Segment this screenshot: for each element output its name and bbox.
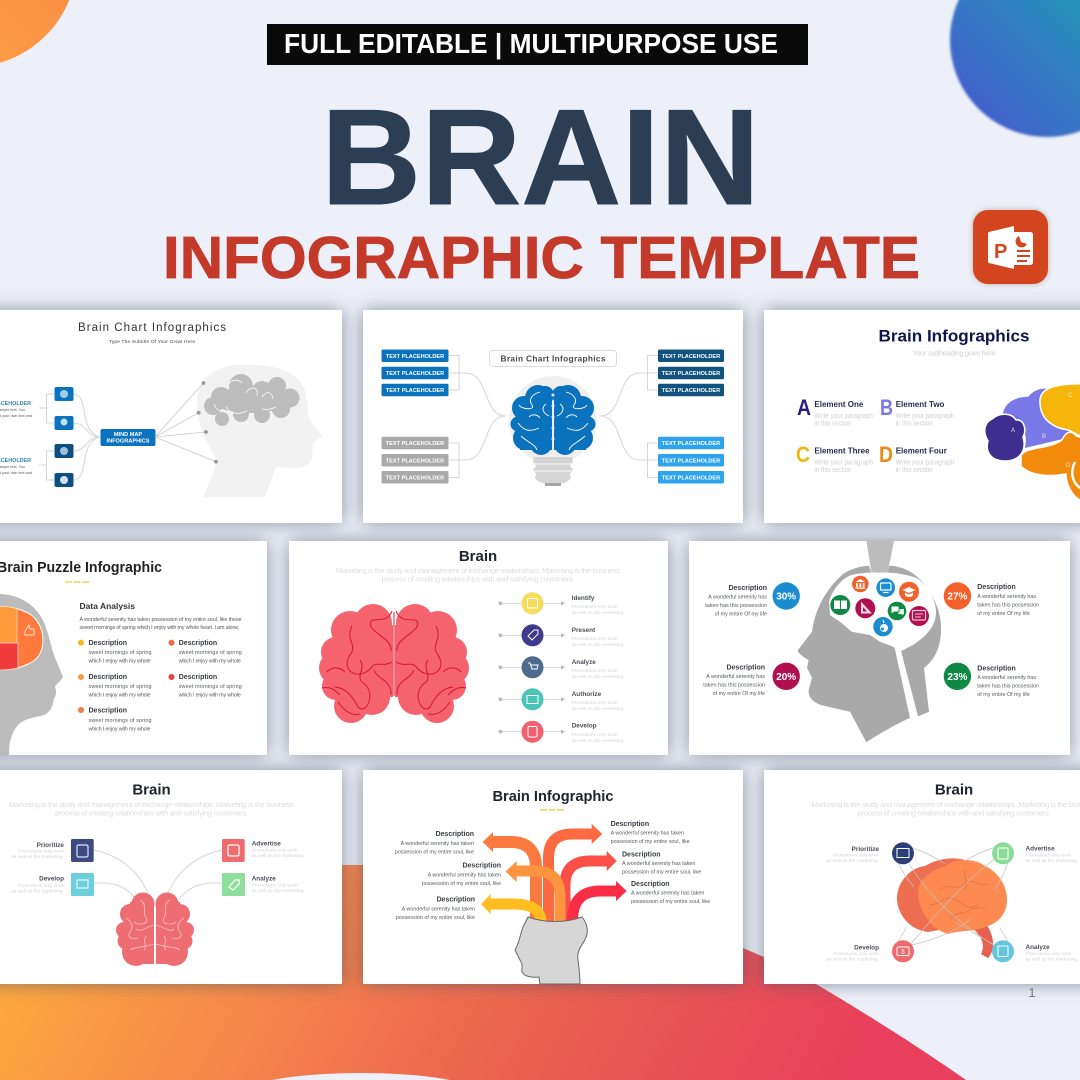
- pink brain: [116, 892, 194, 966]
- item: prioritize: as well as the marketing.: [11, 854, 64, 860]
- list: authorize: as well as the marketing.: [572, 706, 624, 712]
- stat 27%: 27%: [947, 592, 968, 603]
- panel: brain arrows head: [363, 770, 743, 984]
- list: present: Promotions only work: [572, 636, 618, 642]
- stat 30%: Description: [728, 585, 767, 592]
- stat 27%: taken has this possession: [977, 602, 1039, 608]
- element A: Element One: [814, 400, 864, 409]
- stat 20%: [703, 663, 800, 697]
- stat 27%: [944, 582, 1039, 617]
- heading: Brain Chart Infographics: [78, 322, 226, 334]
- center box: INFOGRAPHICS: [107, 438, 150, 444]
- subtitle: INFOGRAPHIC TEMPLATE: [163, 225, 920, 291]
- stat 23%: taken has this possession: [977, 684, 1039, 690]
- connectors: [94, 850, 222, 899]
- heading: Brain: [132, 782, 171, 798]
- list: identify: as well as the marketing.: [572, 610, 624, 616]
- head silhouette: [798, 566, 941, 742]
- data analysis text: sweet mornings of spring which I enjoy with my whole heart. I am alone,: [80, 625, 240, 631]
- item: analyze: Analyze: [1026, 944, 1050, 951]
- item: prioritize: [11, 839, 94, 862]
- item: advertise: Promotions only work: [1026, 852, 1072, 858]
- brain region letters: B: [1042, 434, 1046, 440]
- right descriptions: A wonderful serenity has taken: [631, 890, 704, 896]
- data analysis text: [80, 601, 242, 631]
- descriptions: Description: [88, 674, 127, 681]
- descriptions: sweet mornings of spring: [88, 718, 152, 724]
- blue left buttons: [382, 350, 448, 396]
- banner: FULL EDITABLE | MULTIPURPOSE USE: [284, 28, 778, 59]
- right descriptions: [611, 821, 710, 905]
- item: develop: Develop: [39, 876, 64, 882]
- element C: C: [796, 442, 810, 467]
- left descriptions: Description: [462, 862, 501, 870]
- center box: MIND MAP: [114, 432, 142, 438]
- item: analyze: Promotions only work: [252, 882, 298, 888]
- item: prioritize: as well as the marketing.: [826, 858, 879, 864]
- decorative orange circle: [0, 0, 77, 67]
- item: advertise: [222, 839, 304, 862]
- item: analyze: [992, 940, 1078, 962]
- element D: Element Four: [896, 446, 947, 456]
- brain region letters: C: [1068, 393, 1073, 399]
- left descriptions: A wonderful serenity has taken: [402, 906, 475, 912]
- orange brain illustration: [897, 847, 1008, 958]
- stat 23%: 23%: [947, 672, 968, 683]
- list: present: [498, 624, 624, 648]
- panel: puzzle head: [0, 541, 267, 755]
- center box: [100, 429, 156, 446]
- descriptions: Description: [88, 640, 127, 647]
- placeholder text: [0, 401, 32, 475]
- panel: brain chart light bulb: [363, 310, 743, 523]
- item: develop: $: [901, 950, 905, 956]
- item: develop: Promotions only work: [18, 883, 65, 889]
- right descriptions: possession of my entire soul, like: [622, 870, 701, 876]
- brain region letters: A: [1011, 428, 1015, 434]
- item: develop: Promotions only work: [833, 951, 880, 957]
- item: advertise: as well as the marketing.: [1026, 858, 1078, 864]
- right descriptions: A wonderful serenity has taken: [622, 861, 695, 867]
- title box: [490, 350, 616, 366]
- left descriptions: A wonderful serenity has taken: [428, 872, 501, 878]
- right descriptions: Description: [631, 881, 670, 888]
- item: analyze: Promotions only work: [1026, 951, 1072, 957]
- descriptions: sweet mornings of spring: [179, 684, 242, 690]
- bottom light arc: [246, 1073, 476, 1080]
- element D: D: [879, 442, 893, 467]
- list: authorize: Promotions only work: [572, 700, 618, 706]
- element B: Write your paragraph: [896, 413, 954, 420]
- heading: Brain Infographics: [878, 326, 1030, 346]
- stat 20%: Description: [726, 664, 765, 672]
- descriptions: Description: [179, 674, 217, 681]
- gray left buttons: [382, 437, 448, 484]
- item: advertise: Advertise: [1026, 846, 1055, 852]
- element D: [879, 442, 954, 474]
- element D: Write your paragraph: [896, 460, 954, 466]
- list: analyze: [498, 656, 624, 680]
- descriptions: which I enjoy with my whole: [178, 658, 241, 664]
- panel: red brain: process of creating relationships with and satisfying customers.: [382, 574, 574, 584]
- decorative blue circle: [950, 0, 1080, 137]
- panel: colored brain: [764, 310, 1080, 523]
- item: develop: [826, 940, 914, 962]
- descriptions: which I enjoy with my whole: [88, 692, 150, 698]
- descriptions: sweet mornings of spring: [88, 684, 152, 690]
- element D: in this section: [896, 467, 933, 474]
- arrows: [481, 824, 627, 922]
- element C: Element Three: [814, 446, 870, 456]
- item: develop: as well as the marketing.: [826, 956, 879, 962]
- stat 20%: taken has this possession: [703, 682, 765, 688]
- list: identify: Identify: [572, 595, 595, 602]
- main title: BRAIN: [321, 81, 760, 233]
- heading: Brain Infographic: [492, 788, 614, 805]
- icon: powerpoint: P: [994, 241, 1007, 263]
- panel: orange brain: [764, 770, 1080, 984]
- left descriptions: possession of my entire soul, like: [395, 850, 474, 856]
- icon: powerpoint: [973, 210, 1048, 284]
- connectors: [449, 356, 658, 478]
- bottom gradient wave: [0, 865, 966, 1080]
- stat 30%: 30%: [776, 592, 796, 603]
- list: develop: Develop: [572, 722, 597, 730]
- list: identify: Promotions only work: [572, 604, 618, 610]
- left descriptions: Description: [436, 896, 475, 904]
- subheading: Marketing is the study and management of exchange relationships. Marketing is the business: [336, 566, 620, 575]
- dark right buttons: TEXT PLACEHOLDER: [662, 354, 720, 360]
- item: prioritize: Prioritize: [852, 846, 879, 853]
- panel: brain with four boxes: process of creating relationships with and satisfying customers.: [55, 808, 248, 818]
- element C: Write your paragraph: [814, 460, 873, 466]
- subheading: Your subheading goes here: [912, 348, 996, 358]
- gray left buttons: TEXT PLACEHOLDER: [386, 458, 444, 464]
- data analysis text: A wonderful serenity has taken possession of my entire soul, like these: [80, 617, 242, 623]
- panel: head percentages: [689, 541, 1070, 755]
- panel: orange brain: process of creating relationships with and satisfying customers.: [858, 808, 1050, 818]
- descriptions: which I enjoy with my whole: [88, 658, 150, 664]
- accent dashes: [65, 581, 89, 583]
- gray left buttons: TEXT PLACEHOLDER: [386, 475, 444, 481]
- item: develop: as well as the marketing.: [11, 888, 64, 894]
- item: advertise: Advertise: [252, 840, 281, 848]
- stat 27%: of my entire Of my life: [977, 611, 1030, 617]
- panel: brain with four boxes: [0, 770, 342, 984]
- gray left buttons: TEXT PLACEHOLDER: [386, 441, 444, 447]
- spokes: [155, 381, 218, 464]
- light blue right buttons: TEXT PLACEHOLDER: [662, 441, 720, 447]
- blue left buttons: TEXT PLACEHOLDER: [386, 371, 444, 377]
- descriptions: [78, 640, 242, 732]
- accent dashes: [540, 809, 565, 811]
- head with puzzle brain: [0, 594, 63, 755]
- head: [515, 917, 587, 984]
- descriptions: Description: [88, 708, 127, 714]
- left descriptions: Description: [435, 831, 474, 838]
- brain region letters: [1011, 393, 1073, 469]
- brain region letters: D: [1066, 463, 1071, 469]
- dark right buttons: [658, 350, 724, 396]
- item: prioritize: Prioritize: [37, 842, 64, 849]
- list: develop: [498, 721, 624, 744]
- item: analyze: Analyze: [252, 876, 276, 882]
- stat 30%: A wonderful serenity has: [708, 594, 767, 600]
- list: develop: Promotions only work: [572, 732, 618, 738]
- item: advertise: Promotions only work: [252, 848, 298, 854]
- left descriptions: A wonderful serenity has taken: [401, 841, 474, 847]
- light blue right buttons: TEXT PLACEHOLDER: [662, 475, 720, 481]
- list: present: Present: [572, 627, 596, 634]
- element A: in this section: [814, 420, 851, 428]
- stat 23%: A wonderful serenity has: [977, 675, 1036, 681]
- stat 20%: 20%: [776, 672, 796, 683]
- right descriptions: Description: [622, 852, 661, 858]
- panel: red brain: [289, 541, 668, 755]
- item: prioritize: Promotions only work: [833, 852, 880, 858]
- item: prioritize: Promotions only work: [18, 848, 65, 854]
- element B: in this section: [896, 420, 933, 428]
- item: analyze: as well as the marketing.: [1026, 956, 1078, 962]
- item: develop: [11, 873, 94, 896]
- head silhouette with brain: [197, 365, 322, 497]
- item: develop: Develop: [854, 944, 879, 952]
- element B: [880, 395, 954, 428]
- panel: brain chart head: [0, 310, 342, 523]
- right descriptions: possession of my entire soul, like: [631, 899, 710, 905]
- heading: Brain: [935, 782, 973, 798]
- right descriptions: A wonderful serenity has taken: [611, 830, 684, 836]
- descriptions: which I enjoy with my whole: [178, 692, 241, 698]
- element C: [796, 442, 873, 474]
- red brain illustration: [319, 604, 469, 723]
- item: advertise: [992, 842, 1078, 864]
- element B: Element Two: [896, 400, 945, 409]
- heading: Brain: [459, 548, 497, 565]
- light blue right buttons: TEXT PLACEHOLDER: [662, 458, 720, 464]
- list: present: as well as the marketing.: [572, 642, 624, 648]
- stat 23%: of my entire Of my life: [977, 692, 1030, 698]
- list: authorize: Authorize: [572, 691, 602, 698]
- data analysis text: Data Analysis: [80, 601, 135, 611]
- stat 23%: Description: [977, 666, 1016, 672]
- element C: in this section: [814, 467, 851, 474]
- descriptions: sweet mornings of spring: [179, 650, 242, 656]
- blue left buttons: TEXT PLACEHOLDER: [386, 388, 444, 394]
- list: develop: as well as the marketing.: [572, 738, 624, 744]
- left descriptions: possession of my entire soul, like: [396, 915, 475, 921]
- list: analyze: Promotions only work: [572, 668, 618, 674]
- light bulb brain: [509, 376, 597, 486]
- stat 20%: of my entire Of my life: [713, 691, 765, 697]
- stat 30%: taken has this possession: [705, 603, 767, 609]
- page number: 1: [1028, 985, 1036, 1000]
- icons: [54, 387, 74, 487]
- stat 20%: A wonderful serenity has: [706, 674, 765, 680]
- item: analyze: as well as the marketing.: [252, 888, 304, 894]
- element A: A: [797, 395, 811, 420]
- left descriptions: [395, 831, 501, 921]
- dark right buttons: TEXT PLACEHOLDER: [662, 371, 720, 377]
- subheading: Type The Subtitle Of Your Great Here: [109, 339, 195, 345]
- descriptions: which I enjoy with my whole: [88, 726, 150, 732]
- stat 30%: [705, 582, 800, 618]
- connectors: [39, 394, 100, 480]
- stat 27%: Description: [977, 584, 1016, 591]
- right descriptions: Description: [611, 821, 649, 828]
- right descriptions: possession of my entire soul, like: [611, 839, 690, 845]
- left descriptions: possession of my entire soul, like: [422, 881, 501, 887]
- stat 30%: of my entire Of my life: [715, 612, 767, 618]
- colored brain illustration: [985, 384, 1080, 500]
- blue left buttons: TEXT PLACEHOLDER: [386, 354, 444, 360]
- list: authorize: [498, 688, 624, 712]
- element A: [797, 395, 873, 428]
- item: prioritize: [826, 842, 914, 864]
- title box: Brain Chart Infographics: [500, 354, 606, 364]
- stat 27%: A wonderful serenity has: [977, 594, 1036, 600]
- dark right buttons: TEXT PLACEHOLDER: [662, 388, 720, 394]
- list: analyze: Analyze: [572, 659, 596, 666]
- element A: Write your paragraph: [814, 413, 873, 420]
- heading: Brain Puzzle Infographic: [0, 559, 162, 576]
- item: analyze: [222, 873, 304, 896]
- list: analyze: as well as the marketing.: [572, 674, 624, 680]
- descriptions: Description: [179, 640, 217, 647]
- cone: [866, 541, 894, 576]
- stat 23%: [944, 663, 1039, 698]
- head icons: [830, 576, 929, 636]
- item: advertise: as well as the marketing.: [252, 853, 304, 859]
- list: identify: [498, 592, 624, 616]
- subheading: Marketing is the study and management of exchange relationships. Marketing is the business: [9, 800, 294, 809]
- descriptions: sweet mornings of spring: [88, 650, 152, 656]
- light blue right buttons: [658, 437, 724, 484]
- element B: B: [880, 395, 893, 420]
